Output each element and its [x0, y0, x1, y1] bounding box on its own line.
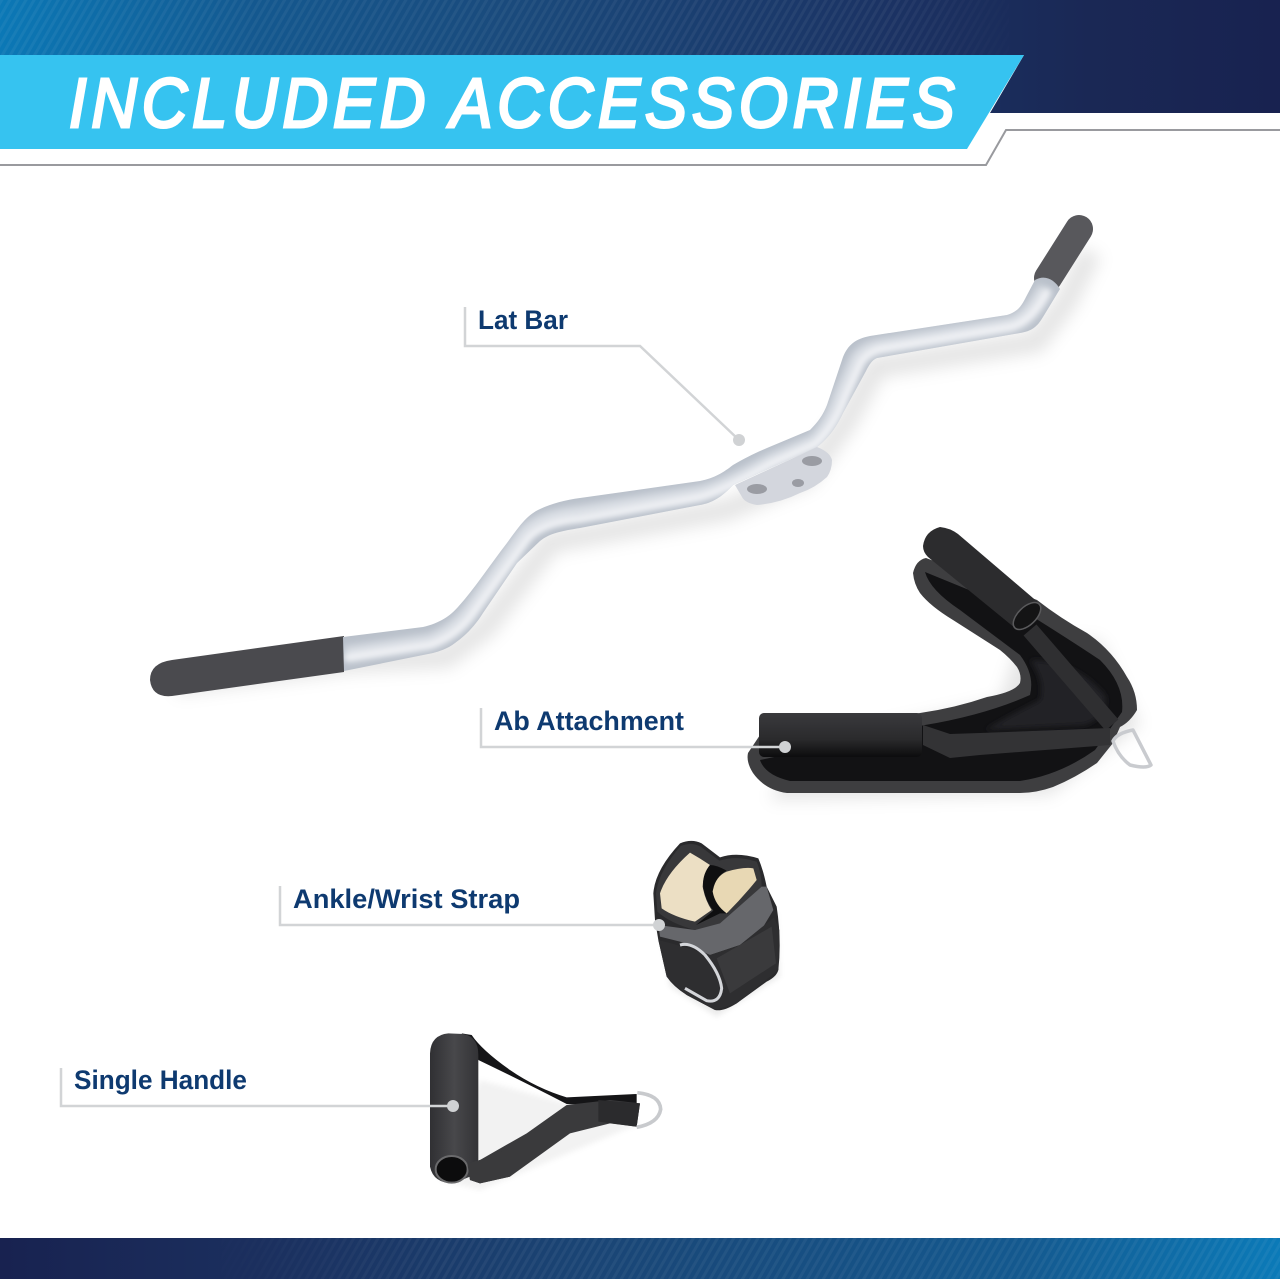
strap body — [653, 841, 780, 1010]
cream lining left — [660, 853, 712, 922]
leather sleeve — [658, 887, 773, 955]
padded sling — [748, 558, 1137, 793]
upper strap — [462, 1033, 637, 1107]
title banner: INCLUDED ACCESSORIES — [69, 65, 955, 143]
inner fold — [696, 865, 728, 925]
d-ring — [680, 944, 722, 1001]
cuff rim — [656, 844, 762, 930]
velcro band — [658, 917, 779, 1010]
upper foam grip — [923, 527, 1040, 628]
lower foam grip — [759, 713, 922, 757]
single handle photo — [430, 1033, 661, 1190]
grip end — [436, 1156, 468, 1183]
strap end tab — [598, 1100, 640, 1127]
callout: single handle — [61, 1065, 459, 1112]
callout: ankle wrist strap: Ankle/Wrist Strap — [293, 884, 520, 914]
callout: lat bar: Lat Bar — [478, 305, 568, 335]
foam grip — [430, 1033, 478, 1183]
mounting plate — [735, 447, 832, 505]
ab attachment photo — [748, 527, 1151, 800]
lower strap overlap — [467, 1148, 510, 1183]
lower strap — [923, 725, 1110, 758]
upper strap — [1030, 630, 1112, 725]
left rubber grip — [150, 636, 344, 696]
ring — [637, 1093, 661, 1127]
ankle wrist strap photo — [653, 841, 780, 1017]
callout: ab attachment: Ab Attachment — [494, 706, 684, 736]
steel bar — [340, 270, 1070, 680]
lat bar photo — [150, 229, 1091, 696]
footer band — [0, 1238, 1280, 1279]
callout: lat bar — [465, 305, 745, 446]
lower strap — [467, 1100, 640, 1183]
callout: ab attachment — [481, 706, 791, 753]
callout: ankle wrist strap — [280, 884, 665, 931]
d-ring — [1113, 730, 1151, 767]
header band — [0, 0, 1280, 165]
callout: single handle: Single Handle — [74, 1065, 247, 1095]
right rubber grip — [1048, 229, 1079, 278]
cream lining right — [713, 868, 757, 913]
